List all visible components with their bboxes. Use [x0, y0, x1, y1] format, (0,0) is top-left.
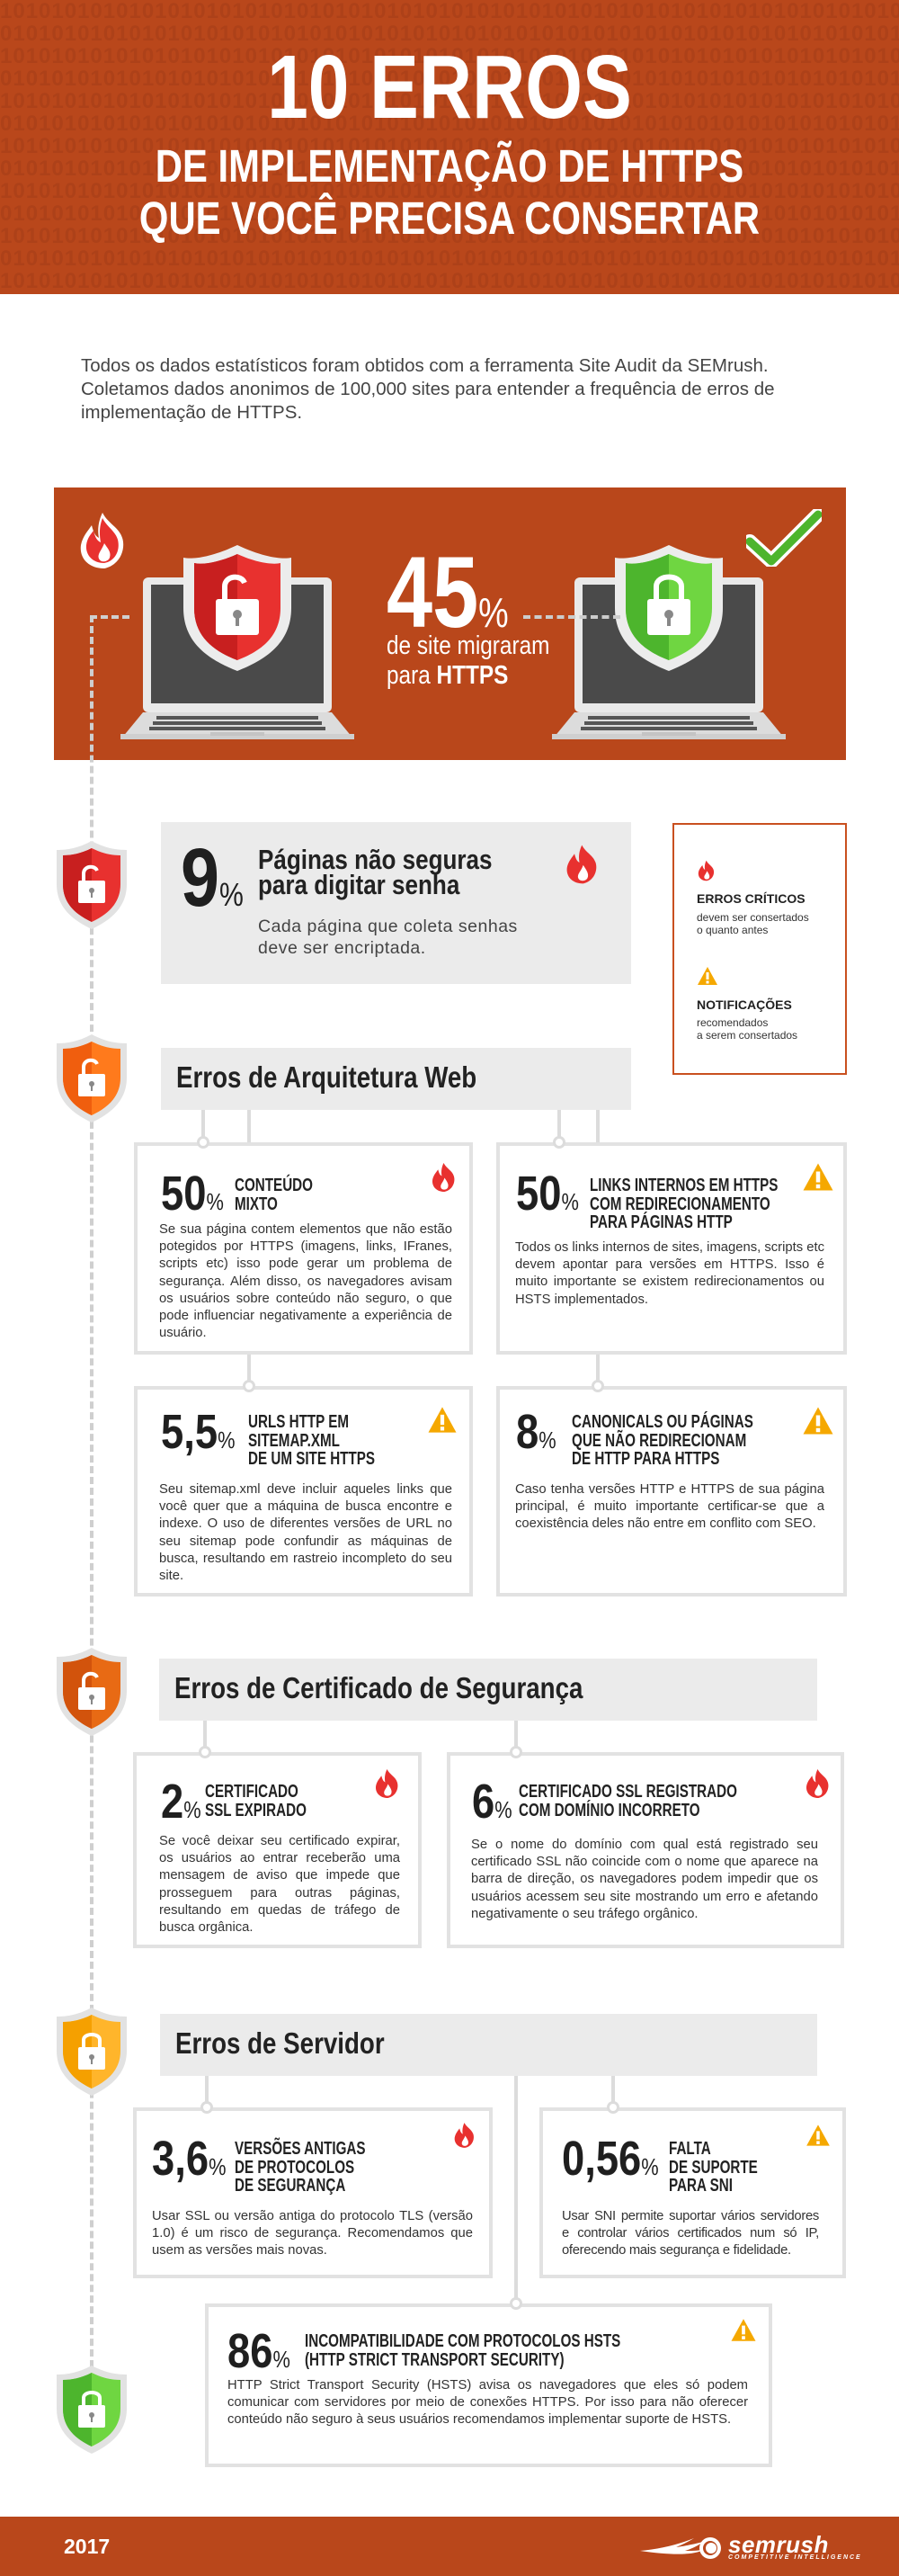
section heading: Certificado	[159, 1659, 817, 1721]
icon: warning	[698, 967, 717, 985]
card: 0,56% SNI: DE SUPORTE	[669, 2157, 758, 2177]
card: 3,6% protocolos antigos: DE PROTOCOLOS	[235, 2157, 354, 2177]
header banner: 0101010101010101010101010101010101010101010101010101010101010101010101	[0, 112, 899, 136]
timeline dashed line	[90, 615, 93, 2378]
card: 2% certificado expirado	[133, 1752, 422, 1948]
header banner: 0101010101010101010101010101010101010101010101010101010101010101010101	[0, 22, 899, 46]
card: 8% canonicals: 8%	[516, 1405, 556, 1459]
card: 3,6% protocolos antigos: DE SEGURANÇA	[235, 2176, 345, 2196]
panel: 9% passwords: 9%	[181, 832, 244, 924]
icon: right laptop with green shield	[552, 545, 786, 739]
card: 5,5% urls http sitemap: SITEMAP.XML	[248, 1430, 340, 1450]
card: 0,56% SNI: PARA SNI	[669, 2176, 733, 2196]
legend box: recomendados	[697, 1016, 768, 1029]
section heading: Certificado: Erros de Certificado de Segurança	[174, 1671, 583, 1704]
card: 5,5% urls http sitemap: DE UM SITE HTTPS	[248, 1449, 375, 1469]
icon: red shield 1	[57, 841, 127, 929]
icon: warning	[732, 2319, 755, 2341]
footer	[0, 2517, 899, 2576]
section heading: Arquitetura Web: Erros de Arquitetura Web	[176, 1060, 476, 1094]
panel: 9% passwords: deve ser encriptada.	[258, 938, 426, 958]
icon: fire	[698, 860, 714, 881]
header banner: 0101010101010101010101010101010101010101010101010101010101010101010101	[0, 201, 899, 226]
legend box: a serem consertados	[697, 1029, 797, 1042]
card: 3,6% protocolos antigos	[133, 2107, 493, 2278]
icon: check mark	[746, 509, 822, 567]
legend box	[672, 823, 847, 1075]
panel: 9% passwords: Cada página que coleta senhas	[258, 917, 518, 936]
card: 0,56% SNI	[539, 2107, 846, 2278]
icon: fire	[566, 845, 597, 883]
icon: left laptop with red shield	[120, 545, 354, 739]
logo: semrush	[640, 2531, 862, 2561]
legend box: o quanto antes	[697, 924, 768, 936]
card: 50% conteúdo mixto: Se sua página contem elementos que não estão potegidos por HTTPS (imagens, links, IFranes, scripts etc) isso pode gerar um problema de segurança. Além disso, os navegadores avisam os usuários sobre conteúdo não seguro, o que pode influenciar negativamente a experiência de usuário.	[159, 1222, 452, 1340]
icon: fire	[455, 2123, 474, 2148]
card: 0,56% SNI: 0,56%	[562, 2132, 659, 2186]
card: 8% canonicals: Caso tenha versões HTTP e HTTPS de sua página principal, é muito importante certificar-se que a coexistência deles não entre em conflito com SEO.	[515, 1482, 824, 1531]
icon: fire	[806, 1769, 829, 1798]
header banner: 0101010101010101010101010101010101010101010101010101010101010101010101	[0, 157, 899, 181]
card: 86% HSTS: (HTTP STRICT TRANSPORT SECURITY)	[305, 2349, 565, 2369]
header banner: 0101010101010101010101010101010101010101010101010101010101010101010101	[0, 67, 899, 91]
icon: fire	[376, 1769, 397, 1798]
title: DE IMPLEMENTAÇÃO DE HTTPS	[156, 140, 743, 192]
stat: 45%: 45%	[387, 536, 509, 648]
intro text: Todos os dados estatísticos foram obtidos com a ferramenta Site Audit da SEMrush. Coletamos dados anonimos de 100,000 sites para entender a frequência de erros de implementação de HTTPS.	[81, 355, 775, 423]
icon: fire	[81, 513, 124, 568]
card: 8% canonicals	[496, 1386, 847, 1597]
card: 50% links internos	[496, 1142, 847, 1355]
card: 2% certificado expirado: CERTIFICADO	[205, 1782, 298, 1802]
section heading: Arquitetura Web	[161, 1048, 631, 1110]
card: 0,56% SNI: Usar SNI permite suportar vários servidores e controlar vários certificados num só IP, oferecendo mais segurança e fidelidade.	[562, 2209, 819, 2258]
card: 86% HSTS: 86%	[227, 2324, 290, 2378]
logo: semrush: semrush	[728, 2531, 829, 2558]
icon: fire	[432, 1163, 455, 1192]
icon: orange shield 2	[57, 1034, 127, 1123]
icon: warning	[804, 1164, 832, 1191]
icon: warning	[428, 1407, 457, 1433]
card: 50% conteúdo mixto: CONTEÚDO	[235, 1176, 313, 1195]
dashed connector	[523, 615, 620, 619]
header banner: 1010101010101010101010101010101010101010101010101010101010101010101010	[0, 224, 899, 248]
icon: warning	[804, 1407, 832, 1434]
icon: green shield 5	[57, 2366, 127, 2454]
card: 8% canonicals: QUE NÃO REDIRECIONAM	[572, 1430, 746, 1450]
card: 2% certificado expirado: 2%	[161, 1775, 201, 1829]
card: 86% HSTS: HTTP Strict Transport Security (HSTS) avisa os navegadores que eles só podem comunicar com servidores por meio de conexões HTTPS. Por isso para não oferecer conteúdo não seguro à seus usuários recomendamos implementar suporte de HSTS.	[227, 2378, 748, 2427]
card: 50% links internos: Todos os links internos de sites, imagens, scripts etc devem apontar para versões em HTTPS. Isso é muito importante se existem redirecionamentos ou HSTS implementados.	[515, 1240, 824, 1307]
panel: 9% passwords	[161, 822, 631, 984]
card: 8% canonicals: DE HTTP PARA HTTPS	[572, 1449, 719, 1469]
logo: semrush: COMPETITIVE INTELLIGENCE	[728, 2554, 862, 2561]
card: 50% links internos: LINKS INTERNOS EM HTTPS	[590, 1176, 778, 1195]
card: 2% certificado expirado: Se você deixar seu certificado expirar, os usuários ao entrar receberão uma mensagem de aviso que impede que prosseguem para outras páginas, resultando em quedas de tráfego de busca orgânica.	[159, 1834, 400, 1935]
card: 5,5% urls http sitemap: 5,5%	[161, 1405, 235, 1459]
card: 2% certificado expirado: SSL EXPIRADO	[205, 1801, 307, 1820]
section heading: Servidor: Erros de Servidor	[175, 2026, 385, 2060]
legend box: devem ser consertados	[697, 911, 809, 924]
card: 50% conteúdo mixto: MIXTO	[235, 1194, 278, 1214]
card: 6% domínio incorreto: CERTIFICADO SSL REGISTRADO	[519, 1782, 737, 1802]
card: 6% domínio incorreto: COM DOMÍNIO INCORRETO	[519, 1801, 700, 1820]
panel: 9% passwords: para digitar senha	[258, 869, 459, 900]
panel: 45% migration hero	[54, 487, 846, 760]
legend box: NOTIFICAÇÕES	[697, 997, 792, 1012]
header banner: 1010101010101010101010101010101010101010101010101010101010101010101010	[0, 89, 899, 113]
title: QUE VOCÊ PRECISA CONSERTAR	[139, 192, 760, 244]
card: 5,5% urls http sitemap	[134, 1386, 473, 1597]
card: 6% domínio incorreto: 6%	[472, 1775, 512, 1829]
card: 0,56% SNI: FALTA	[669, 2139, 711, 2159]
card: 50% links internos: PARA PÁGINAS HTTP	[590, 1212, 733, 1232]
icon: dark orange shield 3	[57, 1648, 127, 1736]
section heading: Servidor	[160, 2014, 817, 2076]
panel: 9% passwords: Páginas não seguras	[258, 844, 493, 875]
title	[139, 37, 760, 244]
title: 10 ERROS	[267, 37, 632, 138]
panel: 45% migration hero: de site migraram	[387, 631, 549, 660]
card: 50% conteúdo mixto: 50%	[161, 1167, 224, 1221]
header banner	[0, 0, 899, 294]
card: 3,6% protocolos antigos: Usar SSL ou versão antiga do protocolo TLS (versão 1.0) é um risco de segurança. Recomendamos que usem as versões mais novas.	[152, 2209, 473, 2258]
header banner: 0101010101010101010101010101010101010101010101010101010101010101010101	[0, 246, 899, 271]
card: 50% links internos: COM REDIRECIONAMENTO	[590, 1194, 770, 1214]
card: 86% HSTS	[205, 2303, 772, 2467]
card: 5,5% urls http sitemap: Seu sitemap.xml deve incluir aqueles links que você quer que a máquina de busca encontre e indexe. O uso de diferentes versões de URL no seu sitemap pode confundir as máquinas de busca, resultando em rastreio incompleto do seu site.	[159, 1482, 452, 1583]
card: 50% conteúdo mixto	[134, 1142, 473, 1355]
icon: warning	[806, 2124, 830, 2146]
header banner: 1010101010101010101010101010101010101010101010101010101010101010101010	[0, 269, 899, 293]
card: 8% canonicals: CANONICALS OU PÁGINAS	[572, 1412, 753, 1432]
footer: 2017	[64, 2535, 110, 2558]
card: 6% domínio incorreto	[447, 1752, 844, 1948]
icon: yellow shield 4	[57, 2008, 127, 2096]
legend box: ERROS CRÍTICOS	[697, 891, 806, 906]
card: 86% HSTS: INCOMPATIBILIDADE COM PROTOCOLOS HSTS	[305, 2331, 620, 2351]
card: 3,6% protocolos antigos: VERSÕES ANTIGAS	[235, 2139, 366, 2159]
card: 50% links internos: 50%	[516, 1167, 579, 1221]
header banner: 1010101010101010101010101010101010101010101010101010101010101010101010	[0, 179, 899, 203]
header banner: 1010101010101010101010101010101010101010101010101010101010101010101010	[0, 44, 899, 68]
panel: 45% migration hero: para HTTPS	[387, 661, 508, 690]
card: 5,5% urls http sitemap: URLS HTTP EM	[248, 1412, 349, 1432]
header banner: 1010101010101010101010101010101010101010101010101010101010101010101010	[0, 134, 899, 158]
card: 3,6% protocolos antigos: 3,6%	[152, 2132, 226, 2186]
card: 6% domínio incorreto: Se o nome do domínio com qual está registrado seu certificado SSL não coincide com o nome que aparece na barra de direção, os navegadores podem impedir que os usuários acessem seu site mostrando um erro e afetando negativamente o seu tráfego orgânico.	[471, 1838, 818, 1921]
